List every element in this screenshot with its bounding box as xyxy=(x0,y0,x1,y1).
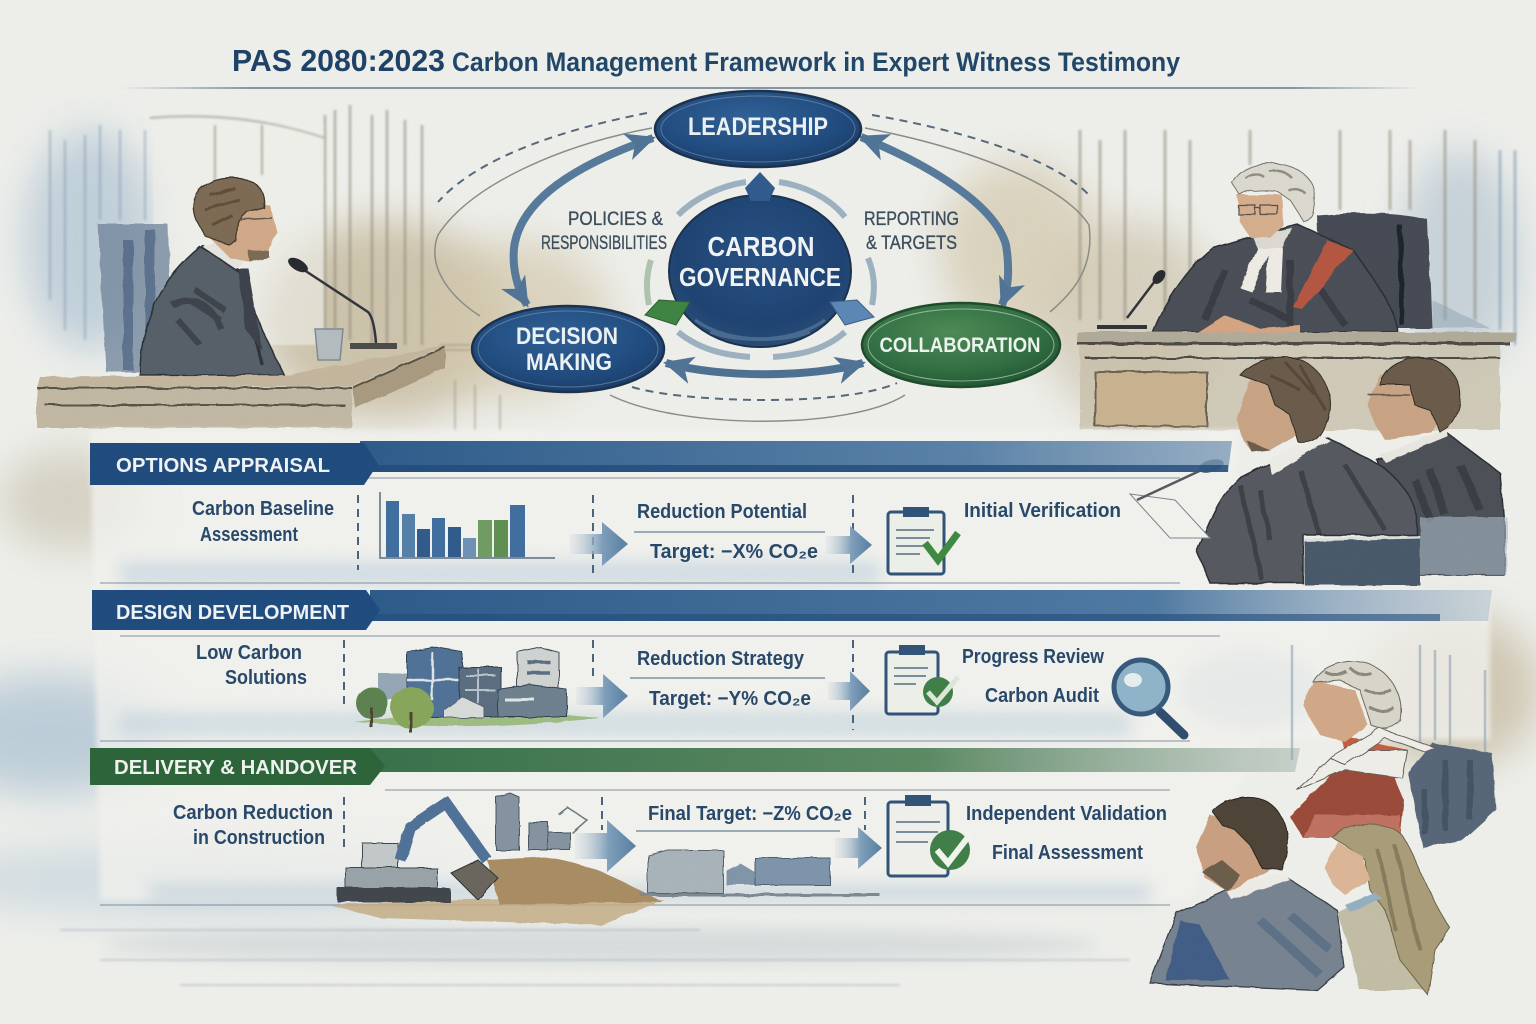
background frame sketch xyxy=(1292,645,1485,760)
text: independent validation and final assessment xyxy=(966,803,1167,864)
arrow xyxy=(835,827,882,869)
man in suit xyxy=(1150,797,1344,990)
title xyxy=(120,43,1420,89)
illustration: excavator and site xyxy=(330,793,880,925)
node: carbon governance: GOVERNANCE xyxy=(679,262,841,292)
text: low carbon solutions: Solutions xyxy=(225,667,307,689)
icon: clipboard with check xyxy=(888,795,972,876)
section band: DESIGN DEVELOPMENT xyxy=(116,602,349,624)
white section panels and rules xyxy=(90,430,1490,905)
icon: clipboard with check xyxy=(888,507,958,574)
panel: options appraisal xyxy=(90,441,1232,575)
judge in red robe xyxy=(1290,661,1435,838)
text: carbon reduction in construction: Carbon Reduction xyxy=(173,802,333,824)
witness chair xyxy=(98,224,172,372)
node: collaboration: COLLABORATION xyxy=(880,334,1040,357)
text: final target: Final Target: −Z% CO₂e xyxy=(648,803,852,825)
node: leadership xyxy=(655,91,861,167)
label: policies and responsibilities: POLICIES & xyxy=(568,209,663,230)
section band xyxy=(92,590,1492,630)
icon: green leaf document xyxy=(645,300,690,325)
text: carbon reduction in construction xyxy=(173,802,333,849)
label: policies and responsibilities xyxy=(541,209,667,254)
governance cycle diagram xyxy=(435,91,1090,421)
cycle arrow: leadership to decision making xyxy=(514,138,653,305)
panel: design development xyxy=(92,590,1492,735)
judge at bench xyxy=(1077,163,1516,430)
node: collaboration xyxy=(862,303,1060,387)
barristers seated xyxy=(1130,357,1507,585)
text: carbon reduction in construction: in Construction xyxy=(193,827,325,849)
judge microphone xyxy=(1097,268,1168,329)
witness stand with expert witness xyxy=(37,178,445,428)
text: progress review and carbon audit: Progress Review xyxy=(962,646,1104,668)
node: leadership: LEADERSHIP xyxy=(688,113,828,141)
title: Carbon Management Framework in Expert Witness Testimony xyxy=(452,47,1180,77)
text: reduction potential and target: Target: −X% CO₂e xyxy=(650,541,818,563)
text: progress review and carbon audit: Carbon Audit xyxy=(985,685,1099,707)
witness desk xyxy=(37,345,445,428)
text: low carbon solutions: Low Carbon xyxy=(196,642,302,664)
witness figure xyxy=(140,178,284,375)
panel: delivery and handover xyxy=(90,748,1300,925)
text: reduction strategy and target: Target: −Y% CO₂e xyxy=(649,688,811,710)
text: carbon baseline assessment: Assessment xyxy=(200,524,298,546)
rear barrister xyxy=(1367,358,1505,575)
node: decision making xyxy=(472,306,664,392)
dashed outer orbit xyxy=(438,113,1089,400)
cycle arrow: leadership to collaboration xyxy=(861,137,1008,305)
icon: clipboard with check xyxy=(886,645,958,714)
woman with blonde hair xyxy=(1325,824,1450,995)
front barrister xyxy=(1197,357,1417,583)
text: carbon baseline assessment: Carbon Baseline xyxy=(192,498,334,520)
arrow xyxy=(576,674,628,718)
section band xyxy=(90,748,1300,785)
courtroom wall panels right xyxy=(1080,130,1515,345)
text: low carbon solutions xyxy=(196,642,307,689)
inner ring arcs xyxy=(647,182,874,357)
arrow xyxy=(828,671,870,711)
label: reporting and targets: & TARGETS xyxy=(866,233,957,254)
text: carbon baseline assessment xyxy=(192,498,334,546)
barrister chair xyxy=(1303,517,1507,585)
icon: blue document xyxy=(830,300,874,325)
section band: DELIVERY & HANDOVER xyxy=(114,757,358,779)
text: initial verification: Initial Verification xyxy=(964,500,1121,522)
node: carbon governance: CARBON xyxy=(708,231,814,262)
courtroom wall panels left xyxy=(50,105,500,430)
label: reporting and targets: REPORTING xyxy=(864,209,959,230)
arrow xyxy=(570,522,628,566)
label: policies and responsibilities: RESPONSIBILITIES xyxy=(541,233,667,254)
water cup xyxy=(315,329,343,360)
node: decision making: MAKING xyxy=(526,349,612,376)
node: carbon governance xyxy=(669,195,851,347)
icon: magnifying glass xyxy=(1114,660,1184,735)
text: independent validation and final assessment: Independent Validation xyxy=(966,803,1167,825)
judge bench xyxy=(1077,332,1516,430)
barrister microphone and papers xyxy=(1130,457,1225,538)
judge figure xyxy=(1153,163,1398,334)
label: reporting and targets xyxy=(864,209,959,254)
cycle arrow: decision making to collaboration xyxy=(666,363,863,374)
node: decision making: DECISION xyxy=(516,323,618,350)
section band xyxy=(90,441,1232,485)
thin orbit lines xyxy=(435,128,1090,421)
arrow xyxy=(575,820,636,872)
text: reduction strategy and target: Reduction Strategy xyxy=(637,648,805,670)
text: reduction strategy and target xyxy=(630,648,825,710)
arrow xyxy=(826,526,872,564)
gallery figures lower right xyxy=(1150,645,1496,995)
rear chair xyxy=(1408,743,1496,848)
microphone xyxy=(286,255,397,349)
text: reduction potential and target xyxy=(634,501,825,563)
title: PAS 2080:2023 xyxy=(232,43,445,78)
section band: OPTIONS APPRAISAL xyxy=(116,455,330,477)
judge chair xyxy=(1317,213,1490,328)
bar chart xyxy=(380,492,555,558)
illustration: low carbon buildings xyxy=(355,647,600,733)
text: progress review and carbon audit xyxy=(962,646,1104,707)
text: reduction potential and target: Reduction Potential xyxy=(637,501,807,523)
core up arrow xyxy=(745,172,775,201)
text: independent validation and final assessment: Final Assessment xyxy=(992,842,1143,864)
